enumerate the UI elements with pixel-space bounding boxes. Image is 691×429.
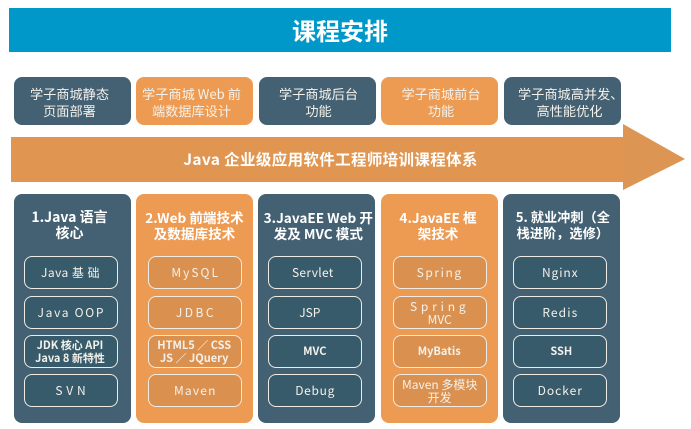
item: Java basics	[24, 256, 118, 289]
item: Spring MVC: MVC	[428, 311, 452, 328]
item: Debug	[268, 374, 362, 407]
item: JDK API: JDK 核心 API	[37, 337, 103, 353]
item: Spring: Spring	[417, 264, 463, 281]
item: HTML5 CSS JS JQuery: JS ／ JQuery	[160, 350, 228, 366]
panel heading	[145, 207, 244, 243]
item: JDBC	[148, 296, 242, 329]
item: Nginx: Nginx	[542, 264, 579, 281]
panel heading	[264, 207, 373, 243]
stage box: high concurrency	[504, 77, 621, 125]
stage box: web and database	[136, 77, 253, 125]
panel: JavaEE Web	[258, 194, 375, 423]
item: HTML5 CSS JS JQuery	[148, 335, 242, 368]
panel heading: 发及 MVC 模式	[274, 223, 363, 243]
item: Maven	[148, 374, 242, 407]
item: SVN	[24, 374, 118, 407]
item: JDBC: JDBC	[176, 304, 216, 321]
stage box: frontend	[381, 77, 498, 125]
item: JDK API	[24, 335, 118, 368]
panel heading: 栈进阶，选修）	[517, 223, 609, 242]
item: Spring MVC: Spring	[410, 298, 469, 315]
panel: JavaEE frameworks	[381, 194, 498, 423]
item: MVC: MVC	[303, 343, 326, 359]
item: Java OOP: Java OOP	[38, 304, 105, 321]
stage box: high concurrency: 学子商城高并发、	[518, 84, 624, 103]
stage box: high concurrency: 高性能优化	[537, 100, 602, 120]
item: JDK API: Java 8 新特性	[35, 350, 105, 366]
panel heading	[399, 207, 477, 243]
item: MySQL: MySQL	[171, 264, 220, 281]
stage box: web and database: 端数据库设计	[152, 100, 231, 120]
panel heading: 5. 就业冲刺（全	[516, 207, 610, 226]
stage box: backend: 学子商城后台	[279, 84, 358, 103]
item: Java basics: Java 基 础	[41, 264, 100, 281]
item: Maven multi-module	[393, 374, 487, 407]
arrow band with course system title	[11, 137, 624, 182]
item: Maven multi-module: 开发	[428, 389, 452, 406]
panel heading	[516, 207, 610, 242]
arrow band with course system title: Java 企业级应用软件工程师培训课程体系	[183, 148, 478, 170]
stage box: frontend: 功能	[428, 100, 454, 120]
item: Servlet: Servlet	[292, 264, 334, 281]
item: Nginx	[513, 256, 607, 289]
item: Spring MVC	[393, 296, 487, 329]
stage box: static pages: 学子商城静态	[30, 84, 109, 103]
title banner	[9, 8, 671, 52]
stage box: static pages: 页面部署	[43, 100, 96, 120]
item: MyBatis	[393, 335, 487, 368]
panel: Java core	[14, 194, 131, 423]
title banner: 课程安排	[292, 12, 388, 47]
stage box: static pages	[14, 77, 131, 125]
panel heading: 及数据库技术	[154, 223, 235, 243]
stage box: backend: 功能	[305, 100, 332, 120]
panel: career sprint	[503, 194, 620, 423]
panel heading: 架技术	[418, 223, 458, 243]
item: HTML5 CSS JS JQuery: HTML5 ／ CSS	[157, 337, 231, 353]
item: Redis: Redis	[542, 304, 578, 321]
item: JSP	[268, 296, 362, 329]
item: MySQL	[148, 256, 242, 289]
item: SVN: SVN	[55, 382, 89, 399]
panel heading	[31, 207, 108, 243]
panel heading: 3.JavaEE Web 开	[264, 207, 373, 227]
item: Maven: Maven	[174, 382, 217, 399]
panel heading: 核心	[56, 223, 84, 243]
arrow head	[623, 124, 685, 190]
item: MyBatis: MyBatis	[418, 343, 461, 359]
panel heading: 2.Web 前端技术	[145, 207, 244, 227]
item: Docker	[513, 374, 607, 407]
stage box: backend	[259, 77, 376, 125]
panel heading: 1.Java 语言	[31, 207, 108, 227]
item: Spring	[393, 256, 487, 289]
item: Java OOP	[24, 296, 118, 329]
stage box: web and database: 学子商城 Web 前	[142, 84, 241, 103]
item: Maven multi-module: Maven 多模块	[402, 376, 477, 393]
panel: web frontend and database	[136, 194, 253, 423]
panel heading: 4.JavaEE 框	[399, 207, 477, 227]
item: Debug: Debug	[295, 382, 335, 399]
item: Docker: Docker	[538, 382, 583, 399]
stage box: frontend: 学子商城前台	[401, 84, 481, 103]
item: SSH: SSH	[550, 343, 572, 359]
item: SSH	[513, 335, 607, 368]
item: MVC	[268, 335, 362, 368]
item: JSP: JSP	[299, 304, 320, 321]
item: Servlet	[268, 256, 362, 289]
item: Redis	[513, 296, 607, 329]
